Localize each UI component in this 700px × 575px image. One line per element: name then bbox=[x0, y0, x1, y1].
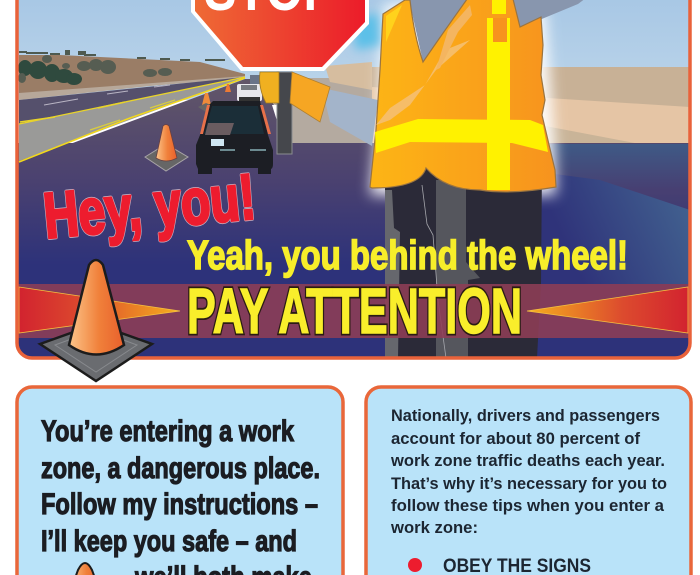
worker sleeve and shirt bbox=[322, 0, 590, 146]
icon: small cone bbox=[70, 563, 100, 575]
panel: driver warning bbox=[17, 387, 343, 575]
icon: large traffic cone bbox=[40, 260, 152, 381]
tips intro text: follow these tips when you enter a bbox=[391, 496, 665, 515]
right sand bands bbox=[372, 67, 688, 143]
heading: Hey, you!: Hey, you! bbox=[41, 160, 258, 252]
black SUV bbox=[196, 101, 273, 174]
sign paddle pole bbox=[272, 72, 292, 154]
heading: PAY ATTENTION bbox=[187, 275, 522, 347]
warning text: You’re entering a work bbox=[41, 415, 294, 448]
tips intro text: That’s why it’s necessary for you to bbox=[391, 474, 667, 493]
gloved hand bbox=[260, 72, 330, 122]
warning text: Follow my instructions – bbox=[41, 488, 318, 521]
warning text: I’ll keep you safe – and bbox=[41, 525, 297, 558]
sky bbox=[17, 0, 690, 100]
heading: PAY ATTENTION: PAY ATTENTION bbox=[187, 275, 522, 347]
white pickup bbox=[237, 75, 262, 101]
tips intro text: account for about 80 percent of bbox=[391, 429, 640, 448]
road cone with diamond base bbox=[145, 124, 188, 171]
stop sign bbox=[191, 0, 369, 71]
lower ground bbox=[17, 143, 690, 358]
warning text: zone, a dangerous place. bbox=[41, 452, 320, 485]
right band triangle bbox=[527, 287, 688, 333]
warning text bbox=[41, 415, 320, 575]
glow behind worker bbox=[370, 0, 556, 195]
panel: tips bbox=[366, 387, 691, 575]
tips intro text bbox=[390, 406, 667, 537]
left band triangle bbox=[19, 287, 180, 333]
road surfaces bbox=[18, 76, 276, 163]
heading: PAY ATTENTION: PAY ATTENTION bbox=[187, 275, 522, 347]
tips intro text: work zone traffic deaths each year. bbox=[390, 451, 665, 470]
tips intro text: Nationally, drivers and passengers bbox=[391, 406, 660, 425]
small traffic cones bbox=[198, 84, 231, 112]
panel border bbox=[17, 0, 690, 358]
heading: Hey, you!: Hey, you! bbox=[41, 160, 258, 252]
tips intro text: work zone: bbox=[390, 518, 478, 537]
roadside shoulder bbox=[274, 78, 372, 143]
panel: hero scene bbox=[17, 0, 690, 381]
hills bbox=[18, 50, 245, 100]
worker legs bbox=[385, 165, 542, 358]
safety vest bbox=[370, 0, 556, 192]
red attention band bbox=[17, 284, 690, 338]
sky reflection beside worker bbox=[352, 12, 380, 50]
